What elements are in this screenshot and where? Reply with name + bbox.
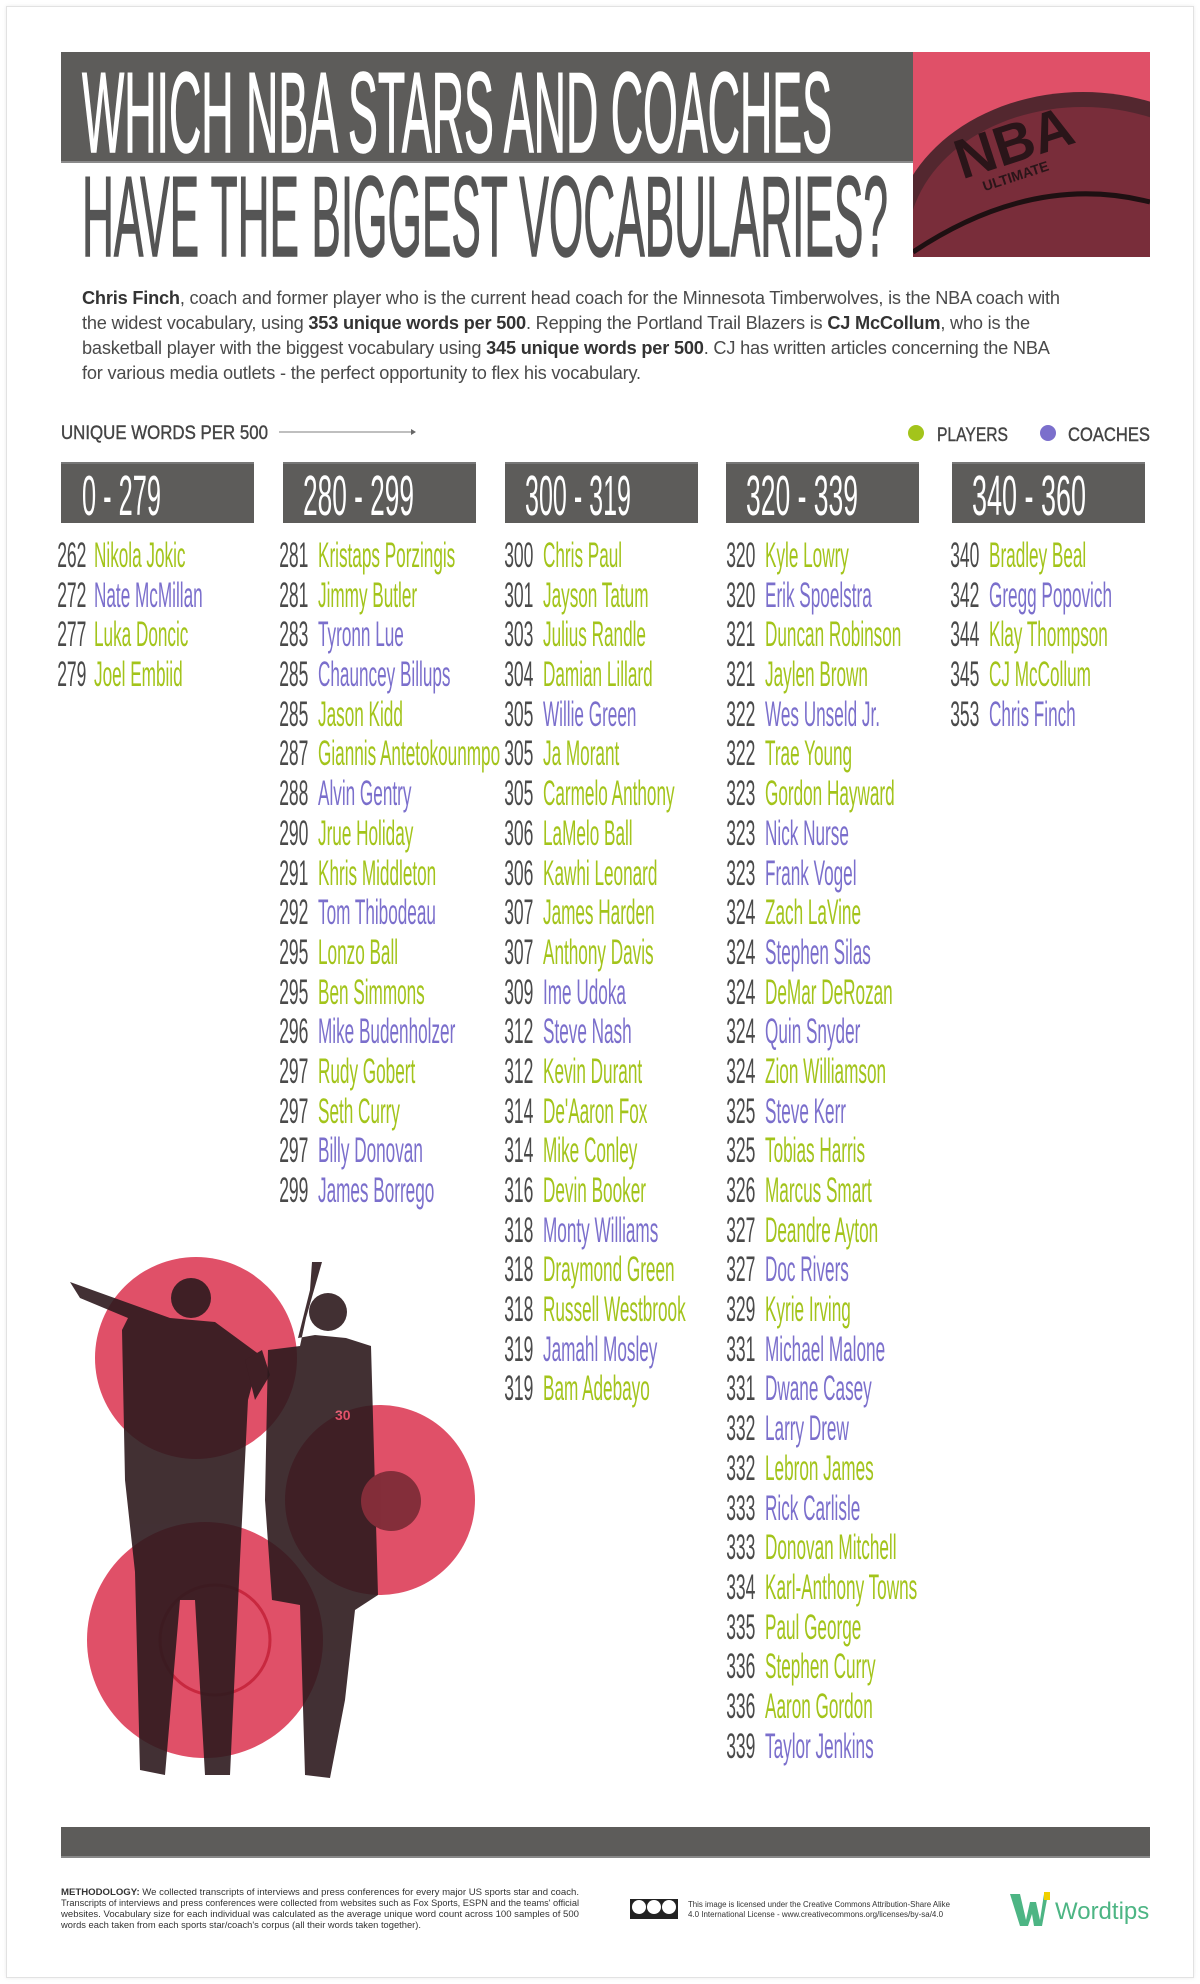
list: 320-339: 323 — [726, 774, 755, 813]
text: Willie Green — [543, 695, 636, 734]
text: Frank Vogel — [765, 854, 857, 892]
text: Rick Carlisle — [765, 1488, 860, 1528]
text: Luka Doncic — [94, 615, 188, 654]
methodology text: words each taken from each sports star/coach's corpus (all their words taken together). — [61, 1920, 421, 1930]
list: 280-299: 291 — [279, 854, 308, 892]
text: Rudy Gobert — [318, 1052, 415, 1091]
list: 0-279: 262 — [57, 536, 86, 575]
list: 300-319: 312 — [504, 1012, 533, 1051]
list: 320-339: 322 — [726, 695, 755, 734]
text: Kyrie Irving — [765, 1290, 851, 1329]
image: NBA basketball — [913, 52, 1150, 257]
list: 0-279: 279 — [57, 655, 86, 694]
text: Dwane Casey — [765, 1369, 872, 1408]
text: Steve Kerr — [765, 1092, 846, 1131]
footer bar — [61, 1827, 1150, 1858]
axis label with arrow — [61, 423, 416, 444]
methodology text — [61, 1887, 579, 1930]
text: Tyronn Lue — [318, 615, 404, 654]
list: 320-339: 323 — [726, 854, 755, 892]
text: Tobias Harris — [765, 1131, 865, 1170]
list: 320-339: 332 — [726, 1409, 755, 1448]
list: 300-319: 318 — [504, 1290, 533, 1329]
list: 300-319: 305 — [504, 734, 533, 773]
list: 320-339: 324 — [726, 973, 755, 1012]
list: 280-299: 281 — [279, 576, 308, 615]
list: 320-339: 336 — [726, 1647, 755, 1686]
text: Donovan Mitchell — [765, 1528, 897, 1567]
text: Carmelo Anthony — [543, 774, 675, 813]
text: Ben Simmons — [318, 973, 425, 1012]
icon: cc badge — [630, 1899, 678, 1919]
text: Chauncey Billups — [318, 655, 451, 694]
text: Jimmy Butler — [318, 576, 417, 615]
text: Monty Williams — [543, 1211, 658, 1250]
text: Paul George — [765, 1608, 861, 1647]
text: Jayson Tatum — [543, 576, 649, 615]
list: 280-299: 281 — [279, 536, 308, 575]
list: 280-299: 299 — [279, 1171, 308, 1210]
list: 300-319: 307 — [504, 893, 533, 932]
list: 300-319: 307 — [504, 933, 533, 972]
list: 300-319: 312 — [504, 1052, 533, 1091]
list: 320-339: 333 — [726, 1488, 755, 1528]
text: Bam Adebayo — [543, 1369, 650, 1408]
methodology text: websites. Vocabulary size for each individual was calculated as the average unique word count across 100 samples of 500 — [61, 1909, 579, 1919]
list: 300-319: 319 — [504, 1369, 533, 1408]
text: Bradley Beal — [989, 536, 1086, 575]
text: Karl-Anthony Towns — [765, 1568, 917, 1607]
list: 320-339: 320 — [726, 536, 755, 575]
list: 340-360: 340 — [950, 536, 979, 575]
legend — [908, 425, 1150, 446]
list: 0-279 — [57, 536, 203, 694]
text: Alvin Gentry — [318, 774, 411, 813]
list: 320-339: 324 — [726, 1012, 755, 1051]
list: 300-319: 314 — [504, 1131, 533, 1170]
list: 320-339: 321 — [726, 615, 755, 654]
text: Seth Curry — [318, 1092, 400, 1131]
list: 320-339: 329 — [726, 1290, 755, 1329]
text: Steve Nash — [543, 1012, 632, 1051]
text: Nick Nurse — [765, 814, 849, 853]
text: Stephen Silas — [765, 933, 871, 972]
title bar background — [61, 52, 913, 163]
intro paragraph: for various media outlets - the perfect opportunity to flex his vocabulary. — [82, 363, 641, 383]
list: 300-319: 305 — [504, 695, 533, 734]
methodology text: METHODOLOGY: We collected transcripts of interviews and press conferences for every major US sports star and coach. — [61, 1887, 579, 1897]
list: 280-299: 297 — [279, 1052, 308, 1091]
text: De'Aaron Fox — [543, 1092, 647, 1131]
text: DeMar DeRozan — [765, 973, 893, 1012]
list: 280-299: 283 — [279, 615, 308, 654]
list: 300-319: 303 — [504, 615, 533, 654]
list: 340-360: 353 — [950, 695, 979, 734]
list: 320-339: 331 — [726, 1330, 755, 1369]
logo: Wordtips: Wordtips — [1055, 1898, 1149, 1925]
text: Quin Snyder — [765, 1012, 860, 1051]
list: 320-339: 321 — [726, 655, 755, 694]
text: Chris Finch — [989, 695, 1076, 734]
list: 300-319: 316 — [504, 1171, 533, 1210]
text: Michael Malone — [765, 1330, 885, 1369]
list: 320-339: 334 — [726, 1568, 755, 1607]
text: Taylor Jenkins — [765, 1727, 874, 1766]
text: Kawhi Leonard — [543, 854, 657, 892]
list: 300-319: 305 — [504, 774, 533, 813]
list: 320-339: 325 — [726, 1131, 755, 1170]
title text — [82, 52, 888, 262]
list: 340-360: 345 — [950, 655, 979, 694]
list: 340-360: 342 — [950, 576, 979, 615]
list: 320-339 — [87, 536, 917, 1775]
list: 300-319: 318 — [504, 1250, 533, 1289]
title banner — [61, 52, 1150, 262]
text: Chris Paul — [543, 536, 622, 575]
license text — [688, 1900, 951, 1919]
list: 320-339: 332 — [726, 1449, 755, 1488]
text: Joel Embiid — [94, 655, 183, 694]
list: 300-319: 318 — [504, 1211, 533, 1250]
list: 280-299: 288 — [279, 774, 308, 813]
list: 320-339: 322 — [726, 734, 755, 773]
list: 300-319: 304 — [504, 655, 533, 694]
text: Mike Budenholzer — [318, 1012, 455, 1051]
list: 280-299: 295 — [279, 933, 308, 972]
list: 320-339: 326 — [726, 1171, 755, 1210]
text: Jaylen Brown — [765, 655, 868, 694]
license text: This image is licensed under the Creative Commons Attribution-Share Alike — [688, 1900, 951, 1909]
text: Aaron Gordon — [765, 1687, 873, 1726]
text: Nate McMillan — [94, 576, 203, 615]
player — [265, 1262, 421, 1778]
text: Marcus Smart — [765, 1171, 872, 1210]
text: Lonzo Ball — [318, 933, 398, 972]
intro paragraph — [82, 288, 1060, 383]
list: 340-360 — [950, 536, 1112, 734]
list: 320-339: 324 — [726, 893, 755, 932]
list: 300-319: 301 — [504, 576, 533, 615]
text: Jamahl Mosley — [543, 1330, 657, 1369]
text: Larry Drew — [765, 1409, 849, 1448]
intro paragraph: basketball player with the biggest vocabulary using 345 unique words per 500. CJ has written articles concerning the NBA — [82, 338, 1050, 358]
text: Julius Randle — [543, 615, 646, 654]
text: Trae Young — [765, 734, 852, 773]
list: 280-299 — [87, 536, 500, 1778]
list: 320-339: 336 — [726, 1687, 755, 1726]
list: 300-319: 306 — [504, 814, 533, 853]
text: Jason Kidd — [318, 695, 403, 734]
license text: 4.0 International License - www.creativecommons.org/licenses/by-sa/4.0 — [688, 1910, 944, 1919]
text: Mike Conley — [543, 1131, 637, 1170]
list: 280-299: 285 — [279, 695, 308, 734]
list: 280-299: 290 — [279, 814, 308, 853]
text: Deandre Ayton — [765, 1211, 878, 1250]
circles — [95, 1257, 297, 1459]
legend: PLAYERS — [937, 425, 1008, 446]
list: 320-339: 323 — [726, 814, 755, 853]
text: Gordon Hayward — [765, 774, 895, 813]
text: Ime Udoka — [543, 973, 626, 1012]
list: 300-319: 306 — [504, 854, 533, 892]
list: 300-319: 309 — [504, 973, 533, 1012]
player: 30 — [335, 1407, 351, 1423]
list: 320-339: 327 — [726, 1250, 755, 1289]
list: 280-299: 295 — [279, 973, 308, 1012]
text: Lebron James — [765, 1449, 874, 1488]
text: Ja Morant — [543, 734, 619, 773]
text: Damian Lillard — [543, 655, 653, 694]
list: 320-339: 324 — [726, 933, 755, 972]
text: Russell Westbrook — [543, 1290, 686, 1329]
list: 280-299: 296 — [279, 1012, 308, 1051]
text: Tom Thibodeau — [318, 893, 436, 932]
coach — [70, 1278, 270, 1775]
list: 340-360: 344 — [950, 615, 979, 654]
image: NBA basketball: ULTIMATE — [980, 158, 1051, 194]
text: James Borrego — [318, 1171, 434, 1210]
illustration: coach and player with circles — [70, 1257, 475, 1778]
text: CJ McCollum — [989, 655, 1091, 694]
text: Kyle Lowry — [765, 536, 849, 575]
list: 320-339: 339 — [726, 1727, 755, 1766]
text: Wes Unseld Jr. — [765, 695, 880, 734]
list: 320-339: 333 — [726, 1528, 755, 1567]
logo: Wordtips — [1010, 1892, 1149, 1926]
image: NBA basketball: NBA — [946, 94, 1081, 191]
list: 0-279: 272 — [57, 576, 86, 615]
list: 320-339: 331 — [726, 1369, 755, 1408]
list: 280-299: 292 — [279, 893, 308, 932]
text: Klay Thompson — [989, 615, 1108, 654]
license badge and text — [630, 1899, 951, 1919]
methodology text: Transcripts of interviews and press conferences were collected from websites such as Fox Sports, ESPN and the teams' official — [61, 1898, 579, 1908]
text: Duncan Robinson — [765, 615, 901, 654]
list: 320-339: 324 — [726, 1052, 755, 1091]
text: Khris Middleton — [318, 854, 436, 892]
list: 280-299: 297 — [279, 1131, 308, 1170]
text: Anthony Davis — [543, 933, 654, 972]
list: 280-299: 297 — [279, 1092, 308, 1131]
list: 280-299: 287 — [279, 734, 308, 773]
text: Nikola Jokic — [94, 536, 185, 575]
intro paragraph: Chris Finch, coach and former player who is the current head coach for the Minnesota Timberwolves, is the NBA coach with — [82, 288, 1060, 308]
text: Giannis Antetokounmpo — [318, 734, 500, 773]
text: Draymond Green — [543, 1250, 675, 1289]
text: Jrue Holiday — [318, 814, 413, 853]
axis label with arrow: UNIQUE WORDS PER 500 — [61, 423, 268, 444]
text: Kevin Durant — [543, 1052, 642, 1091]
list: 0-279: 277 — [57, 615, 86, 654]
text: LaMelo Ball — [543, 814, 633, 853]
text: Zion Williamson — [765, 1052, 886, 1091]
text: Stephen Curry — [765, 1647, 876, 1686]
list: 300-319: 314 — [504, 1092, 533, 1131]
list: 280-299: 285 — [279, 655, 308, 694]
intro paragraph: the widest vocabulary, using 353 unique words per 500. Repping the Portland Trail Blazers is CJ McCollum, who is the — [82, 313, 1030, 333]
list: 300-319: 300 — [504, 536, 533, 575]
list: 320-339: 320 — [726, 576, 755, 615]
text: Erik Spoelstra — [765, 576, 872, 615]
text: Devin Booker — [543, 1171, 646, 1210]
list: 320-339: 335 — [726, 1608, 755, 1647]
text: Gregg Popovich — [989, 576, 1112, 615]
list: 300-319 — [87, 536, 686, 1778]
list: 300-319: 319 — [504, 1330, 533, 1369]
text: Kristaps Porzingis — [318, 536, 455, 575]
text: James Harden — [543, 893, 655, 932]
list: 320-339: 325 — [726, 1092, 755, 1131]
text: Zach LaVine — [765, 893, 861, 932]
list: 320-339: 327 — [726, 1211, 755, 1250]
text: Billy Donovan — [318, 1131, 423, 1170]
text: Doc Rivers — [765, 1250, 849, 1289]
